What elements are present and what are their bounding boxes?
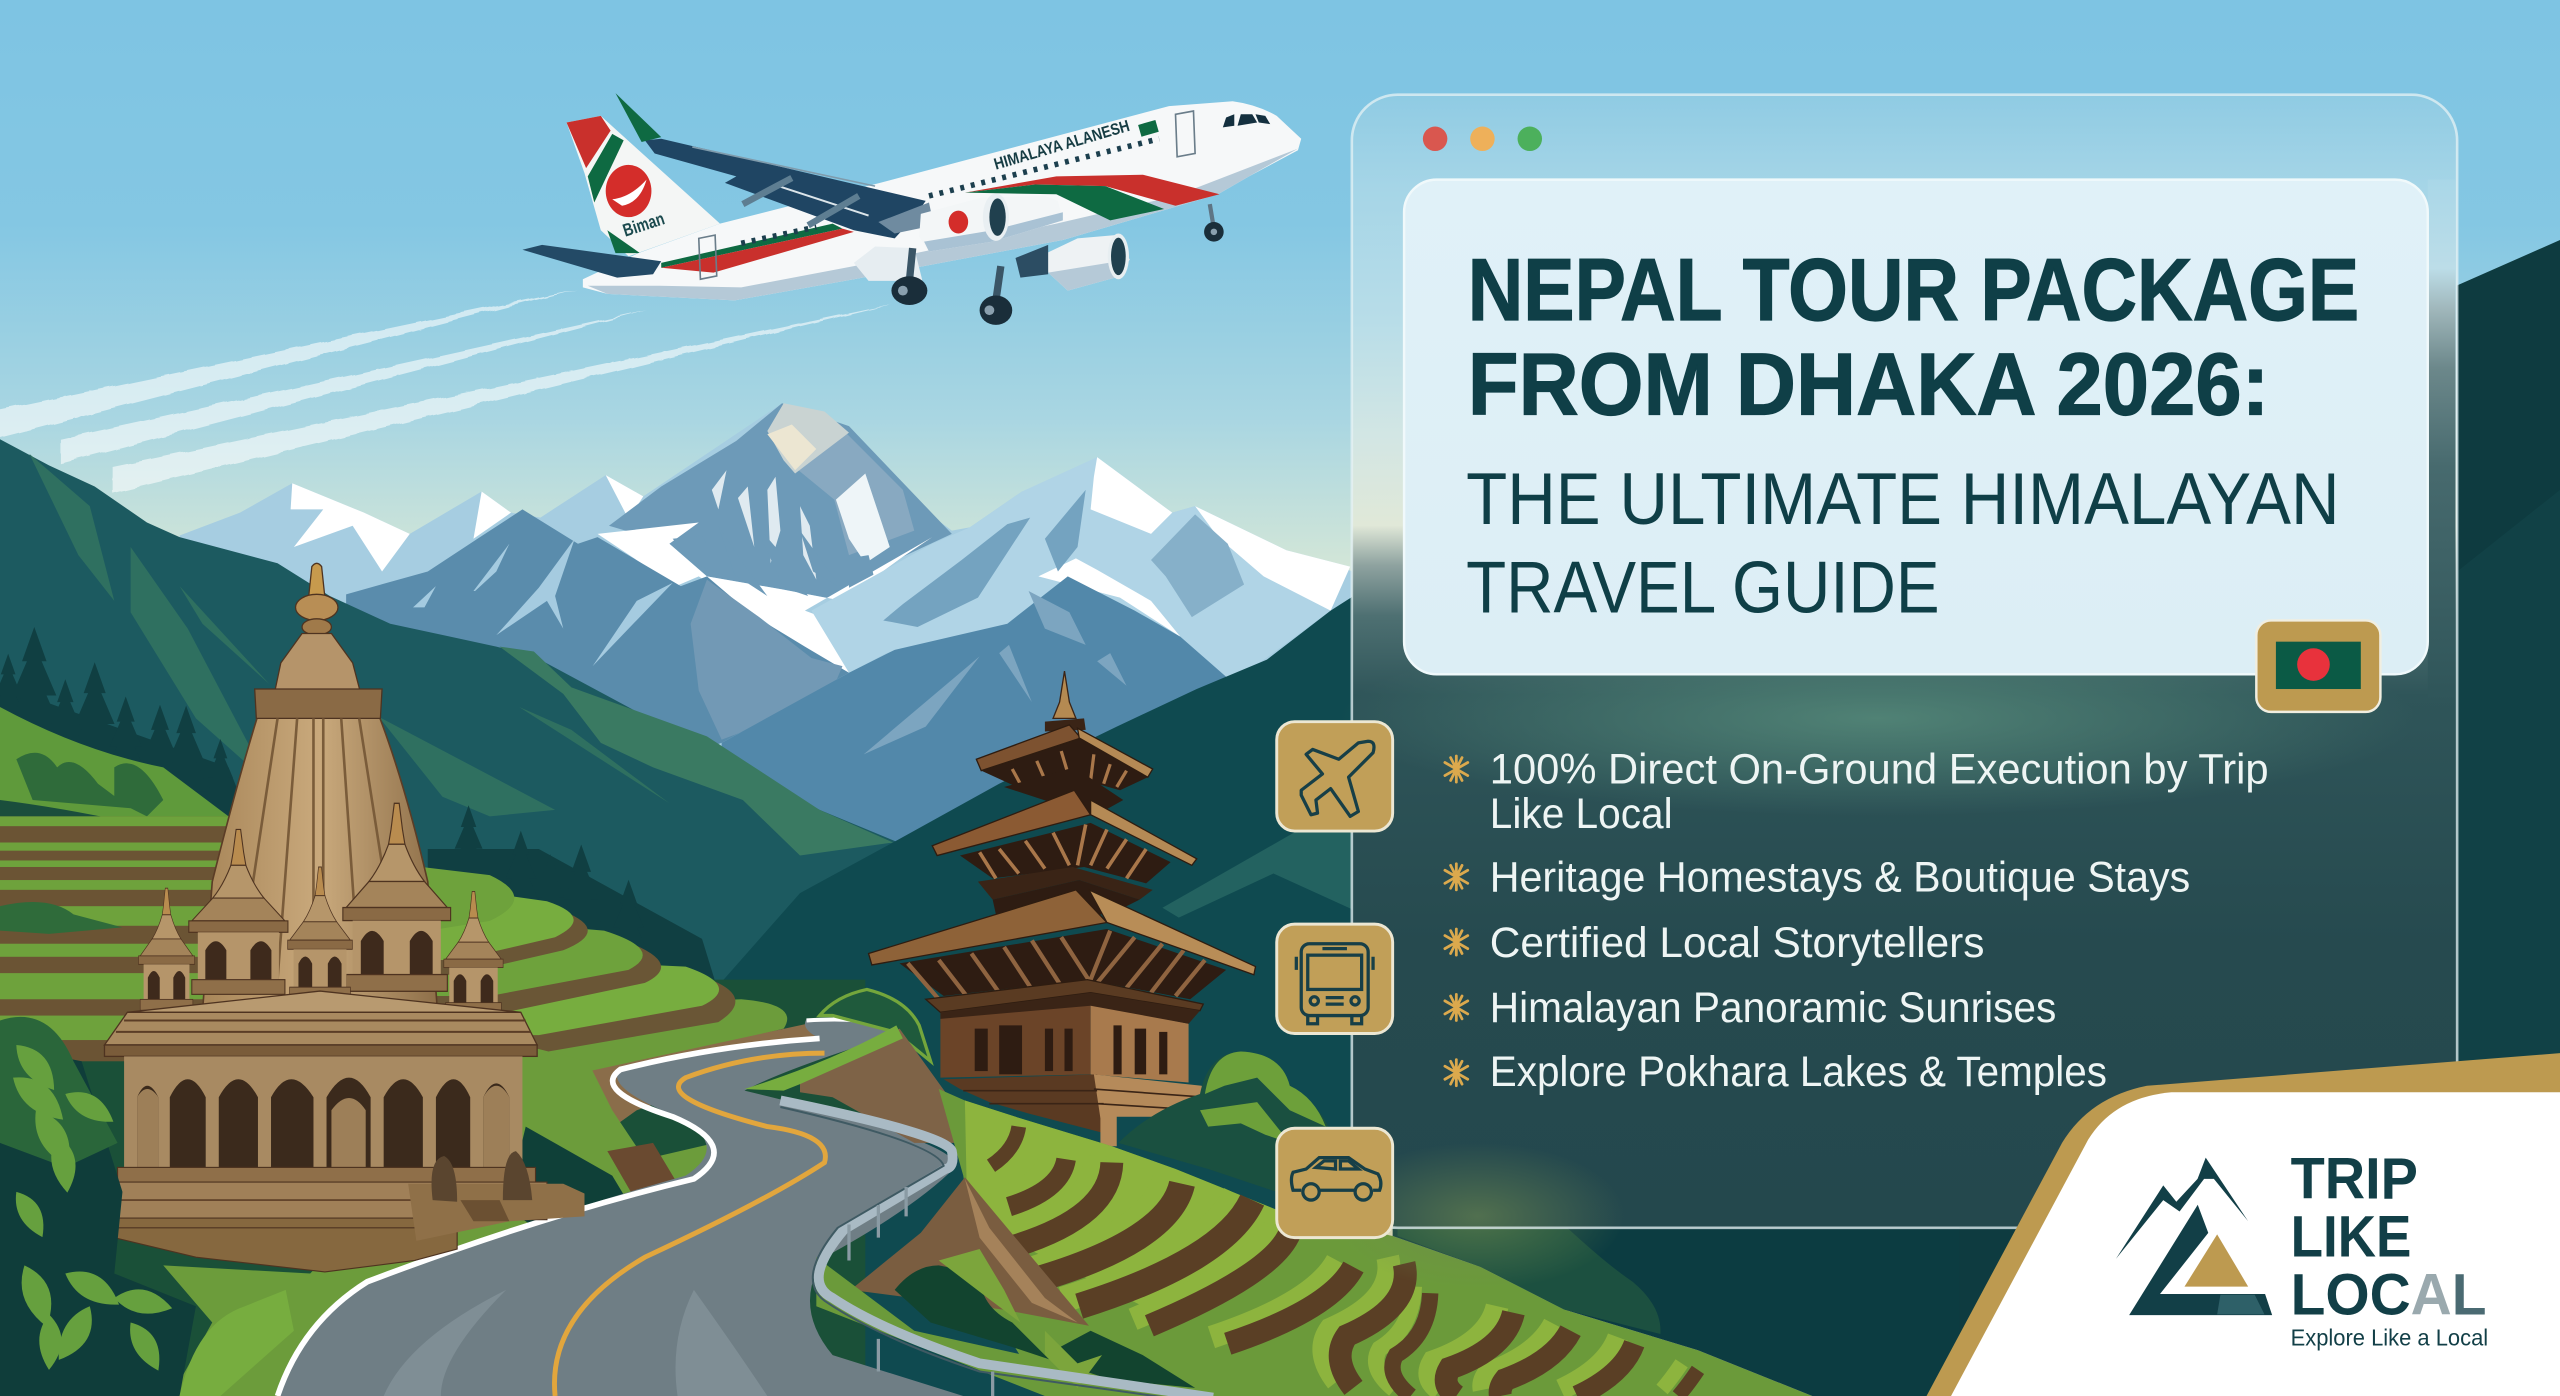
main title: NEPAL TOUR PACKAGE — [1468, 240, 2359, 339]
back snowy range — [180, 403, 1363, 1012]
tagline: Explore Like a Local — [2291, 1324, 2488, 1350]
distant light slope on right hill — [1162, 803, 1363, 918]
horizontal stabilizer — [522, 245, 661, 278]
pagoda finial — [1053, 671, 1076, 718]
main peak snow — [598, 522, 932, 673]
main title — [1468, 240, 2359, 434]
slope grass rim — [744, 1025, 903, 1091]
pagoda body — [940, 1004, 1091, 1078]
bullet 5: Explore Pokhara Lakes & Temples — [1490, 1048, 2107, 1095]
bush right of pagoda — [1118, 1051, 1363, 1200]
temple plinth — [118, 1167, 536, 1182]
terraces right of the temple — [408, 865, 787, 1143]
wing — [645, 139, 926, 238]
icon: bus — [1277, 924, 1393, 1034]
windows — [929, 139, 1159, 196]
fuselage — [583, 101, 1301, 300]
pagoda top tier — [981, 738, 1148, 790]
title card — [1404, 180, 2428, 674]
pagoda second tier — [1004, 767, 1123, 816]
guardrail — [780, 1100, 1213, 1396]
subtitle: THE ULTIMATE HIMALAYAN — [1466, 457, 2340, 540]
main title: FROM DHAKA 2026: — [1468, 335, 2269, 434]
pagoda base — [944, 1074, 1110, 1135]
left terraces — [0, 707, 278, 1061]
logo corner — [1927, 1053, 2560, 1396]
logo wordmark: TRIP — [2291, 1147, 2418, 1211]
subtitle — [1466, 457, 2340, 628]
left green hill — [0, 439, 914, 996]
bushes on slope — [895, 1265, 1195, 1388]
temple steps and lions — [408, 1184, 584, 1241]
mountain range — [180, 403, 1363, 1012]
temple colonnade — [124, 1056, 522, 1171]
stripes — [965, 175, 1220, 206]
bullet list — [1445, 746, 2269, 1095]
far engine — [1047, 233, 1130, 291]
bullet 1: Like Local — [1490, 790, 1673, 837]
main peak streaks — [673, 522, 873, 596]
temple tower body — [202, 715, 438, 1012]
tower right — [343, 803, 451, 991]
white panel — [1951, 1092, 2560, 1396]
flag badge — [2256, 620, 2380, 712]
bullet 1 — [1445, 746, 2269, 837]
temple spire — [309, 563, 325, 598]
glass panel — [1331, 95, 2457, 1290]
back ridge snow — [291, 475, 643, 571]
small flag — [1138, 120, 1159, 137]
main peak face — [609, 403, 952, 601]
window dots — [1423, 127, 1542, 151]
small tower far left — [139, 888, 195, 1010]
logo wordmark: LIKE — [2291, 1205, 2411, 1269]
subtitle: TRAVEL GUIDE — [1466, 545, 1940, 628]
right front ridge — [722, 576, 1241, 980]
mid blue ridge — [346, 509, 849, 816]
pine trees — [0, 627, 735, 1045]
icon: car — [1277, 1128, 1393, 1238]
slope under pagoda — [800, 1029, 980, 1143]
bush behind road bend — [820, 989, 931, 1061]
tower left — [189, 829, 288, 994]
gold band — [1927, 1053, 2560, 1396]
bullet 4: Himalayan Panoramic Sunrises — [1490, 984, 2056, 1031]
cliff — [851, 1177, 1089, 1326]
logo mark — [2116, 1158, 2271, 1314]
doors — [1176, 111, 1195, 157]
bullet 2: Heritage Homestays & Boutique Stays — [1490, 853, 2190, 900]
cockpit — [1223, 114, 1270, 127]
right dark hill — [702, 585, 1371, 1396]
logo wordmark — [2291, 1147, 2487, 1327]
temple upper roof — [127, 991, 521, 1012]
pagoda temple — [869, 671, 1256, 1146]
near engine — [878, 193, 1063, 251]
small tower far right — [444, 891, 503, 1014]
foreground foliage — [0, 1017, 294, 1396]
grass below guardrail — [816, 1257, 1208, 1396]
tail label: Biman — [620, 208, 667, 241]
bullet 1: 100% Direct On-Ground Execution by Trip — [1490, 746, 2269, 793]
pagoda third tier — [900, 929, 1226, 999]
gear bay — [1016, 245, 1048, 278]
bush below panel — [1398, 1228, 1660, 1334]
contrails — [0, 289, 893, 493]
logo wordmark: LOCAL — [2291, 1263, 2487, 1327]
tail fin — [567, 116, 720, 256]
backdrop below panel — [1393, 1228, 2122, 1396]
right mountain outside panel — [1959, 240, 2560, 1396]
stone shikhara temple — [82, 563, 584, 1272]
winding road — [278, 1018, 963, 1396]
landing gear — [891, 204, 1224, 325]
bullet 3: Certified Local Storytellers — [1490, 919, 1984, 966]
belly fairing — [854, 247, 922, 281]
right terraces — [816, 1089, 1812, 1396]
airplane — [522, 93, 1301, 325]
ground and road edge slope — [163, 1022, 824, 1396]
fuselage lettering: HIMALAYA ALANESH — [992, 117, 1132, 174]
right slope — [811, 457, 1350, 682]
icon: plane — [1277, 722, 1393, 831]
tower centre — [288, 867, 352, 999]
lower ground base — [0, 980, 865, 1396]
